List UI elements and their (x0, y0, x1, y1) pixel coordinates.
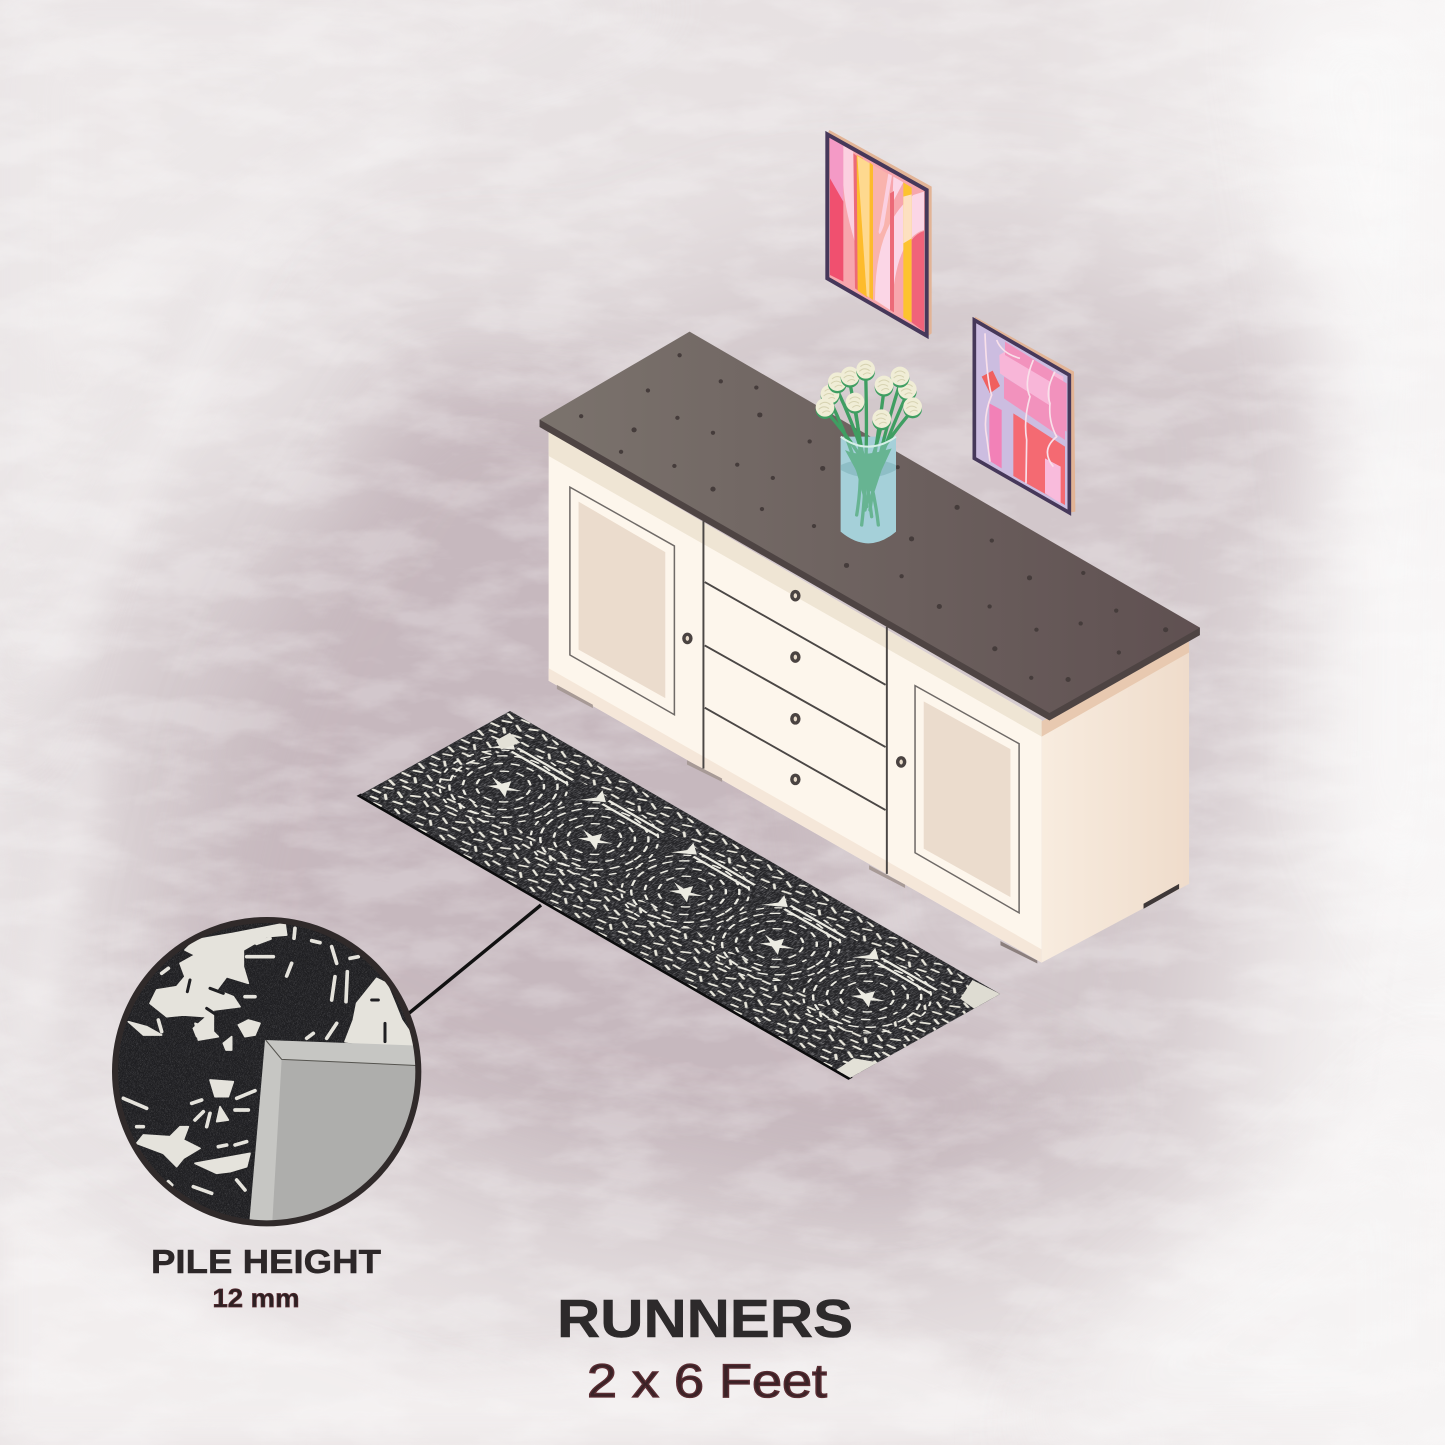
medallions (438, 750, 932, 1034)
green leaves inside the vase (845, 448, 892, 493)
left door panel (570, 487, 674, 715)
rug end motifs (960, 980, 1000, 1008)
cabinet feet (557, 685, 1179, 963)
turned-over rug corner, backing (272, 1059, 420, 1233)
inset black pile (115, 920, 419, 1224)
connector line from rug to inset (408, 905, 541, 1014)
turned-over rug corner, binding (248, 1040, 420, 1233)
countertop surface (540, 332, 1200, 713)
countertop edge (540, 420, 1200, 721)
runner rug (357, 710, 1001, 1080)
shadow band under the top (549, 432, 1042, 737)
inset ring (115, 920, 418, 1223)
subtitle: size: 2 x 6 Feet (587, 1354, 827, 1407)
vase with white roses (816, 360, 922, 543)
dark cuts in the cream blobs (186, 978, 386, 1044)
wall picture: warm abstract stripes (827, 130, 932, 337)
rose heads (816, 360, 922, 430)
wall picture: pink and lilac abstract (974, 317, 1075, 513)
peach edge under top (1042, 641, 1189, 737)
label: pile height: PILE HEIGHT (151, 1243, 381, 1280)
label: 12 mm: 12 mm (212, 1283, 300, 1313)
border forks (489, 736, 943, 998)
right door panel (915, 686, 1019, 913)
inset circle: pile height detail (113, 920, 420, 1233)
vase glass overlay (841, 437, 896, 543)
rug dash pattern (360, 711, 1000, 1078)
cream pile blobs (128, 923, 420, 1173)
drawer dividers (703, 521, 887, 874)
rug thickness (357, 793, 853, 1080)
diagonal brush sweeps (30, 120, 1400, 1320)
corner fold line (266, 1040, 420, 1066)
cabinet handles (684, 592, 905, 784)
water level (841, 459, 896, 477)
pile grain (113, 920, 420, 1223)
rug base (360, 711, 1000, 1078)
plinth band (549, 668, 1042, 963)
sideboard cabinet (540, 332, 1200, 963)
cream pile flecks (123, 928, 358, 1193)
title: runners: RUNNERS (557, 1289, 853, 1349)
cabinet front face (549, 432, 1042, 963)
vase rim (841, 437, 896, 447)
countertop speckles (579, 353, 1168, 682)
vase body back (841, 437, 896, 543)
cabinet side face (1042, 648, 1189, 963)
rug grain (360, 711, 1000, 1078)
rose stems (825, 373, 913, 525)
